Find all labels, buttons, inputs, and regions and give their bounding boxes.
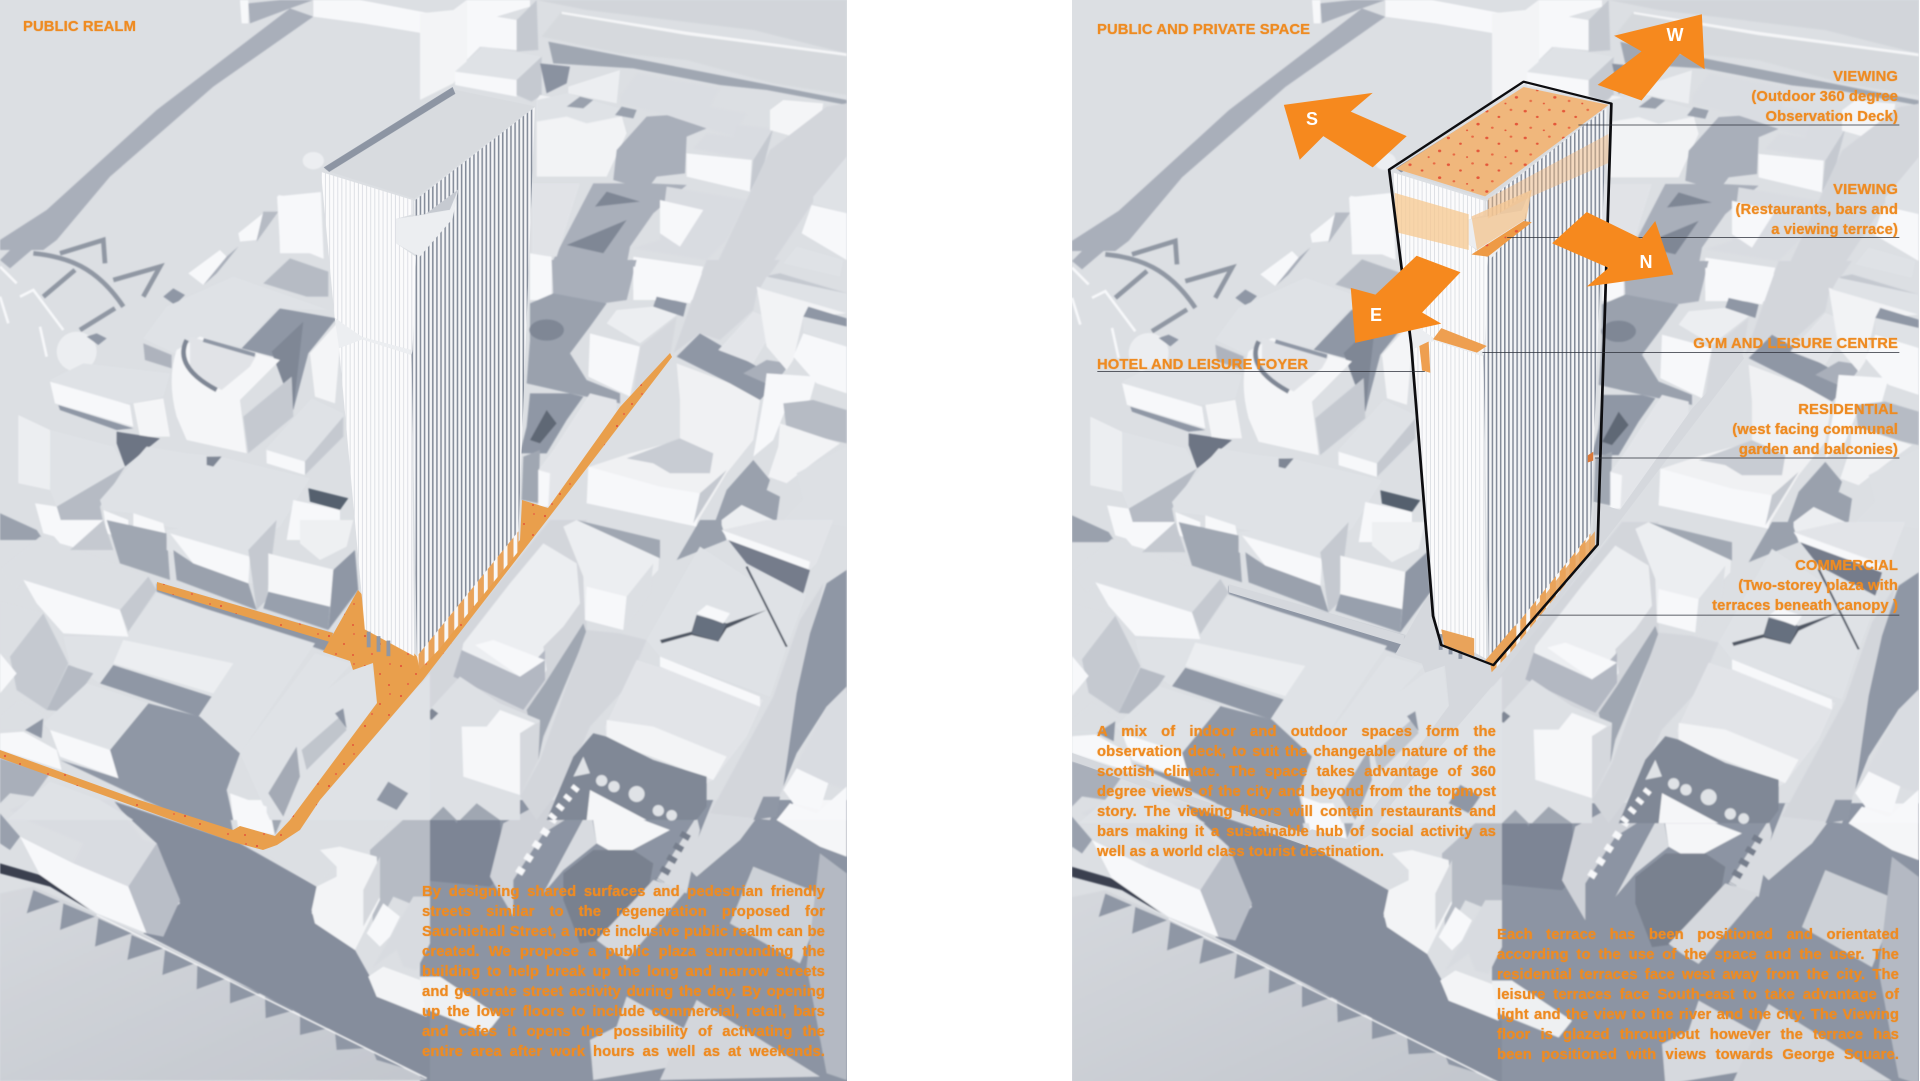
tower [321, 87, 535, 670]
text block: public realm description: By designing shared surfaces and pedestrian friendly [422, 884, 825, 900]
text block: observation deck description [1096, 724, 1496, 860]
compass letters [1306, 25, 1684, 325]
text block: public realm description: and generate street activity during the day. By opening [422, 984, 825, 1000]
hotel foyer terrace [1419, 341, 1430, 373]
heading: public realm: PUBLIC REALM [23, 19, 136, 35]
text block: terrace description: Each terrace has been positioned and orientated [1497, 927, 1899, 943]
compass letters: N [1640, 252, 1652, 272]
label: residential: garden and balconies) [1739, 442, 1898, 458]
text block: observation deck description: well as a world class tourist destination. [1097, 844, 1384, 860]
text block: terrace description: leisure terraces face South-east to take advantage of [1497, 987, 1899, 1003]
label: viewing observation deck: (Outdoor 360 degree [1751, 89, 1898, 105]
label: gym and leisure centre: GYM AND LEISURE CENTRE [1693, 336, 1898, 352]
text block: terrace description: light and the view to the river and the city. The Viewing [1497, 1007, 1899, 1023]
observation deck overlay [1396, 87, 1609, 196]
panel: public and private space city view [1072, 0, 1920, 1081]
text block: terrace description: residential terraces face west away from the city. The [1497, 967, 1899, 983]
label: viewing restaurants: VIEWING [1833, 182, 1898, 198]
text block: public realm description: building to help break up the long and narrow streets [422, 964, 825, 980]
label: viewing observation deck: VIEWING [1833, 69, 1898, 85]
text block: public realm description: up the lower floors to include commercial, retail, bars [422, 1004, 825, 1020]
label: commercial: COMMERCIAL [1795, 558, 1898, 574]
text block: public realm description [422, 884, 826, 1060]
compass letters: S [1306, 109, 1318, 129]
label: residential: (west facing communal [1732, 422, 1898, 438]
compass letters: W [1666, 25, 1684, 45]
text block: public realm description: streets similar to the regeneration proposed for [422, 904, 825, 920]
text block: terrace description: been positioned with views towards George Square. [1497, 1047, 1899, 1063]
label: commercial: (Two-storey plaza with [1738, 578, 1898, 594]
text block: observation deck description: A mix of indoor and outdoor spaces form the [1097, 724, 1496, 740]
gym and leisure terrace [1433, 328, 1487, 353]
text block: terrace description: floor is glazed throughout however the terrace has [1497, 1027, 1899, 1043]
arrow: west [1598, 14, 1705, 100]
arrow: south [1284, 93, 1407, 167]
residential balcony [1588, 452, 1593, 462]
label: hotel and leisure foyer: HOTEL AND LEISURE FOYER [1097, 357, 1308, 373]
text block: public realm description: Sauchiehall Street, a more inclusive public realm can be [422, 924, 825, 940]
text block: public realm description: and cafes it opens the possibility of activating the [422, 1024, 825, 1040]
panel: public realm city view [0, 0, 850, 1081]
text block: observation deck description: scottish climate. The space takes advantage of 360 [1097, 764, 1496, 780]
label: viewing observation deck [1751, 69, 1898, 125]
label: residential: RESIDENTIAL [1798, 402, 1898, 418]
text block: observation deck description: degree views of the city and beyond from the topmost [1097, 784, 1496, 800]
label: viewing restaurants: a viewing terrace) [1771, 222, 1898, 238]
commercial base [1441, 531, 1595, 665]
label: residential [1732, 402, 1898, 458]
text block: public realm description: entire area after work hours as well as at weekends. [422, 1044, 825, 1060]
arrow: north [1552, 212, 1673, 287]
heading: public and private space: PUBLIC AND PRIVATE SPACE [1097, 22, 1310, 38]
text block: terrace description [1496, 927, 1900, 1063]
label: viewing restaurants [1735, 182, 1898, 238]
label: viewing observation deck: Observation Deck) [1766, 109, 1898, 125]
leader lines [1097, 125, 1899, 615]
tower outline [1389, 82, 1611, 665]
text block: public realm description: created. We propose a public plaza surrounding the [422, 944, 825, 960]
arrow: east [1351, 256, 1460, 343]
label: viewing restaurants: (Restaurants, bars and [1735, 202, 1898, 218]
label: commercial [1712, 558, 1898, 614]
label: commercial: terraces beneath canopy ) [1712, 598, 1898, 614]
text block: terrace description: according to the use of the space and the user. The [1497, 947, 1899, 963]
compass letters: E [1370, 305, 1382, 325]
text block: observation deck description: observation deck, to suit the changeable nature of the [1097, 744, 1496, 760]
viewing floors overlay [1395, 134, 1609, 257]
text block: observation deck description: story. The viewing floors will contain restaurants and [1097, 804, 1496, 820]
text block: observation deck description: bars making it a sustainable hub of social activity as [1097, 824, 1496, 840]
orange public realm street and plaza [0, 353, 672, 850]
